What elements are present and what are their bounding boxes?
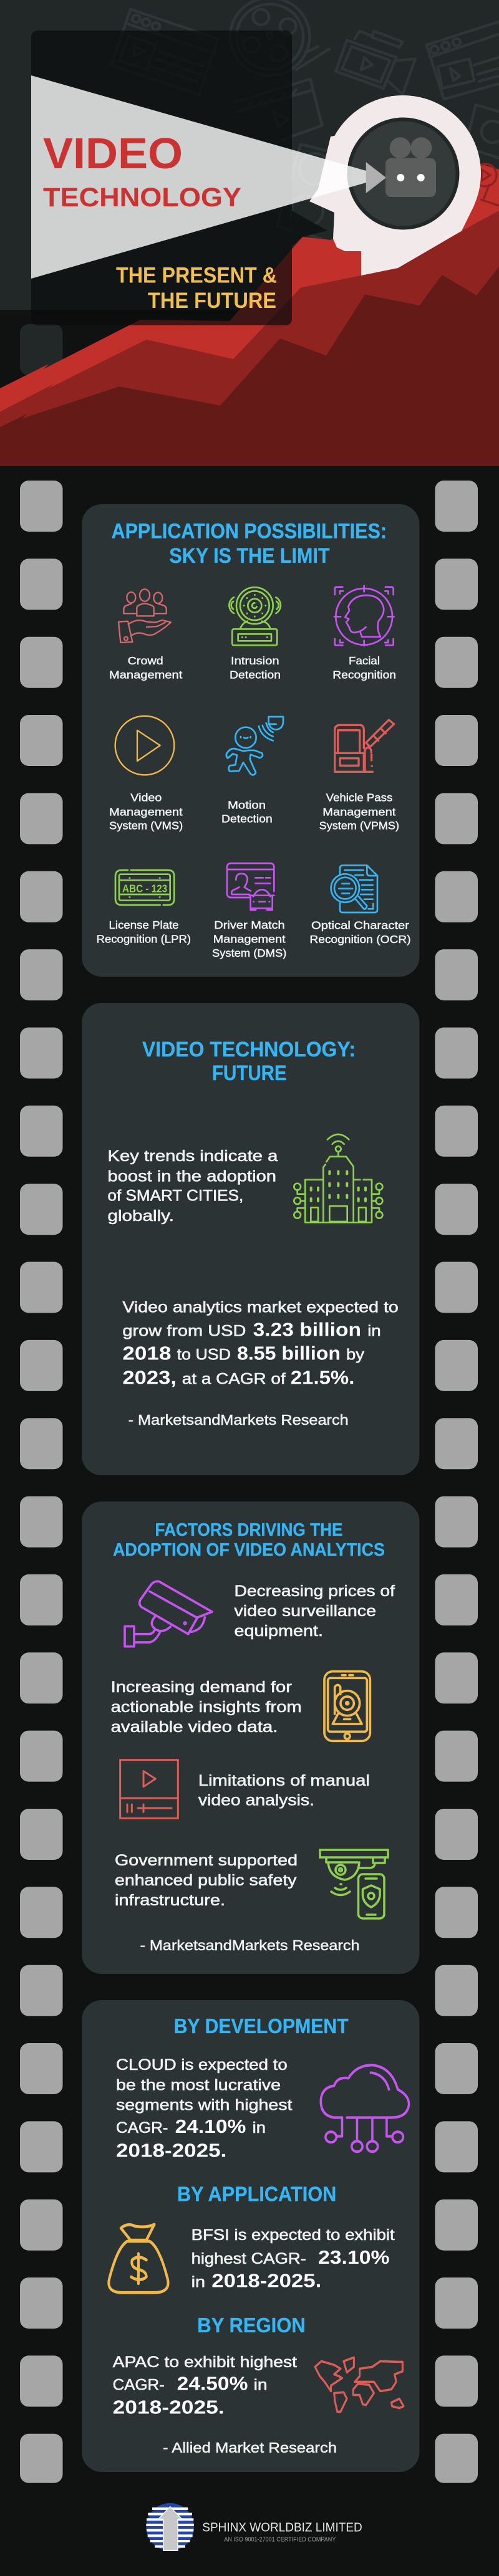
icon: phone webcam xyxy=(324,1672,370,1741)
company name: SPHINX WORLDBIZ LIMITED xyxy=(202,2521,362,2535)
text block xyxy=(198,1772,370,1809)
label: Facial xyxy=(349,654,380,667)
text block: cloud: CAGR- xyxy=(116,2119,168,2137)
source: - MarketsandMarkets Research xyxy=(128,1412,349,1428)
projector beam xyxy=(31,75,366,279)
heading: by region: BY REGION xyxy=(197,2314,306,2337)
label: Video xyxy=(130,791,162,803)
icon: smart city xyxy=(294,1134,382,1222)
icon: video management play button xyxy=(115,716,174,775)
label xyxy=(309,919,411,946)
certification: AN ISO 9001-27001 CERTIFIED COMPANY xyxy=(224,2535,336,2543)
heading xyxy=(142,1038,356,1085)
heading xyxy=(112,520,387,568)
text block: video analysis. xyxy=(198,1792,314,1809)
text block: cloud: 2018-2025. xyxy=(116,2140,226,2162)
text block xyxy=(111,1678,302,1736)
text block: market growth: Video analytics market expected to xyxy=(122,1299,399,1316)
text block: APAC: 2018-2025. xyxy=(113,2396,225,2418)
red mountain back layer xyxy=(0,164,499,466)
text block: Government supported xyxy=(115,1852,298,1869)
icon: motion detection xyxy=(226,717,283,775)
text block: cloud: CLOUD is expected to xyxy=(116,2056,288,2074)
text block: smart cities: of SMART CITIES, xyxy=(107,1187,243,1205)
label xyxy=(332,654,396,681)
heading: FUTURE xyxy=(212,1061,287,1085)
text block: APAC: in xyxy=(254,2377,268,2394)
text block: market growth: to USD xyxy=(177,1346,231,1364)
icon: intrusion detection xyxy=(229,587,281,645)
icon: driver match xyxy=(227,863,274,910)
label: Recognition (OCR) xyxy=(309,933,411,946)
label xyxy=(230,654,281,681)
text block: APAC: 24.50% xyxy=(177,2373,248,2395)
label xyxy=(221,798,273,825)
text block: market growth: by xyxy=(346,1346,365,1364)
label: Management xyxy=(322,805,395,818)
text block: Limitations of manual xyxy=(198,1772,370,1789)
label: Vehicle Pass xyxy=(326,791,393,803)
label: System (VPMS) xyxy=(319,820,399,832)
icon: license plate: ABC - 123 xyxy=(122,883,167,895)
subtitle xyxy=(116,263,277,313)
heading: FACTORS DRIVING THE xyxy=(155,1520,343,1540)
text block: smart cities: boost in the adoption xyxy=(107,1167,276,1185)
text block: Increasing demand for xyxy=(111,1678,292,1696)
label: Recognition xyxy=(332,669,396,681)
title xyxy=(43,129,241,213)
title: VIDEO xyxy=(43,129,183,178)
title dark panel xyxy=(31,31,292,325)
text block: smart cities: Key trends indicate a xyxy=(107,1147,278,1165)
text block: APAC xyxy=(113,2353,297,2418)
text block: market growth xyxy=(122,1299,399,1389)
label xyxy=(319,791,399,832)
logo emblem xyxy=(146,2503,194,2551)
heading: VIDEO TECHNOLOGY: xyxy=(142,1038,356,1061)
icon: crowd management xyxy=(119,589,171,643)
label: License Plate xyxy=(109,919,179,931)
film sprockets right xyxy=(435,481,478,2483)
subtitle: THE FUTURE xyxy=(148,289,276,313)
label: System (VMS) xyxy=(109,820,183,832)
panel: segments xyxy=(82,2000,419,2472)
icon: surveillance camera xyxy=(125,1581,212,1647)
text block: cloud: in xyxy=(253,2119,266,2137)
label: System (DMS) xyxy=(212,947,286,959)
label: Driver Match xyxy=(214,919,285,931)
heading: by development: BY DEVELOPMENT xyxy=(174,2014,349,2037)
text block: BFSI: 2018-2025. xyxy=(211,2269,321,2291)
text block: market growth: grow from USD xyxy=(122,1322,246,1339)
icon: cloud xyxy=(321,2065,409,2152)
text block: enhanced public safety xyxy=(115,1872,297,1889)
label: Management xyxy=(213,933,286,946)
text block: actionable insights from xyxy=(111,1698,302,1716)
text block: BFSI: BFSI is expected to exhibit xyxy=(191,2226,395,2244)
heading: by application: BY APPLICATION xyxy=(177,2183,336,2206)
panel: application possibilities xyxy=(82,504,419,977)
text block: cloud: segments with highest xyxy=(116,2097,292,2114)
shadow under nose xyxy=(292,211,327,246)
icon: video player xyxy=(120,1760,178,1818)
panel: driving factors xyxy=(82,1501,419,1974)
label: Intrusion xyxy=(231,654,279,667)
background line icons xyxy=(112,0,499,239)
source: - MarketsandMarkets Research xyxy=(140,1937,359,1953)
heading: APPLICATION POSSIBILITIES: xyxy=(112,520,387,543)
text block: equipment. xyxy=(235,1622,323,1640)
heading xyxy=(113,1520,385,1560)
text block: market growth: in xyxy=(367,1322,381,1339)
text block: market growth: 8.55 billion xyxy=(237,1343,341,1364)
label: Detection xyxy=(230,669,281,681)
label: Detection xyxy=(221,812,273,825)
label: Management xyxy=(109,805,183,818)
label: Recognition (LPR) xyxy=(97,932,191,945)
head silhouette xyxy=(309,95,481,275)
heading: ADOPTION OF VIDEO ANALYTICS xyxy=(113,1540,385,1560)
film sprocket hidden xyxy=(20,324,62,375)
title: TECHNOLOGY xyxy=(43,183,241,213)
label: Motion xyxy=(228,798,266,811)
text block: BFSI: 23.10% xyxy=(318,2246,389,2268)
icon: vehicle pass barrier xyxy=(335,720,394,772)
icon: optical character recognition xyxy=(331,865,377,912)
text block: cloud: 24.10% xyxy=(175,2115,246,2137)
text block xyxy=(115,1852,298,1909)
text block: market growth: 3.23 billion xyxy=(253,1318,361,1340)
icon: facial recognition xyxy=(334,586,394,646)
text block: video surveillance xyxy=(235,1602,376,1620)
label xyxy=(97,919,191,945)
text block: BFSI: highest CAGR- xyxy=(191,2250,306,2267)
film strip black ground xyxy=(0,310,499,466)
label: Crowd xyxy=(128,654,163,667)
label: Optical Character xyxy=(311,919,409,931)
text block: available video data. xyxy=(111,1718,278,1736)
text block: Decreasing prices of xyxy=(235,1582,395,1600)
panel: future xyxy=(82,1003,419,1475)
movie camera icon xyxy=(366,137,436,197)
text block xyxy=(235,1582,395,1640)
text block: APAC: APAC to exhibit highest xyxy=(113,2353,297,2371)
source: - Allied Market Research xyxy=(163,2440,337,2456)
head inner circle xyxy=(347,117,459,229)
heading: SKY IS THE LIMIT xyxy=(169,544,330,568)
reel icon over red xyxy=(474,164,499,206)
text block: market growth: 2018 xyxy=(122,1343,171,1364)
label xyxy=(109,654,182,681)
film sprockets left xyxy=(20,481,62,2483)
text block: smart cities: globally. xyxy=(107,1207,174,1225)
icon: money bag xyxy=(109,2224,168,2292)
text block: infrastructure. xyxy=(115,1892,225,1909)
text block: market growth: 2023, xyxy=(122,1367,177,1389)
text block: smart cities xyxy=(107,1147,278,1225)
text block: cloud: be the most lucrative xyxy=(116,2077,281,2094)
text block: market growth: at a CAGR of xyxy=(182,1371,286,1388)
red mountain front layer xyxy=(0,267,499,466)
text block: BFSI xyxy=(191,2226,395,2291)
text block: market growth: 21.5%. xyxy=(291,1367,354,1389)
label: Management xyxy=(109,669,182,681)
text block: APAC: CAGR- xyxy=(113,2377,165,2394)
icon: world map xyxy=(315,2357,404,2412)
label xyxy=(212,919,286,959)
text block: cloud xyxy=(116,2056,292,2162)
red mountain middle layer xyxy=(0,211,499,466)
footer logo xyxy=(146,2503,362,2551)
icon: license plate xyxy=(115,870,174,905)
icon: public safety camera xyxy=(320,1850,388,1918)
hero banner xyxy=(0,0,499,466)
label xyxy=(109,791,183,832)
subtitle: THE PRESENT & xyxy=(116,263,277,288)
text block: BFSI: in xyxy=(191,2273,205,2291)
